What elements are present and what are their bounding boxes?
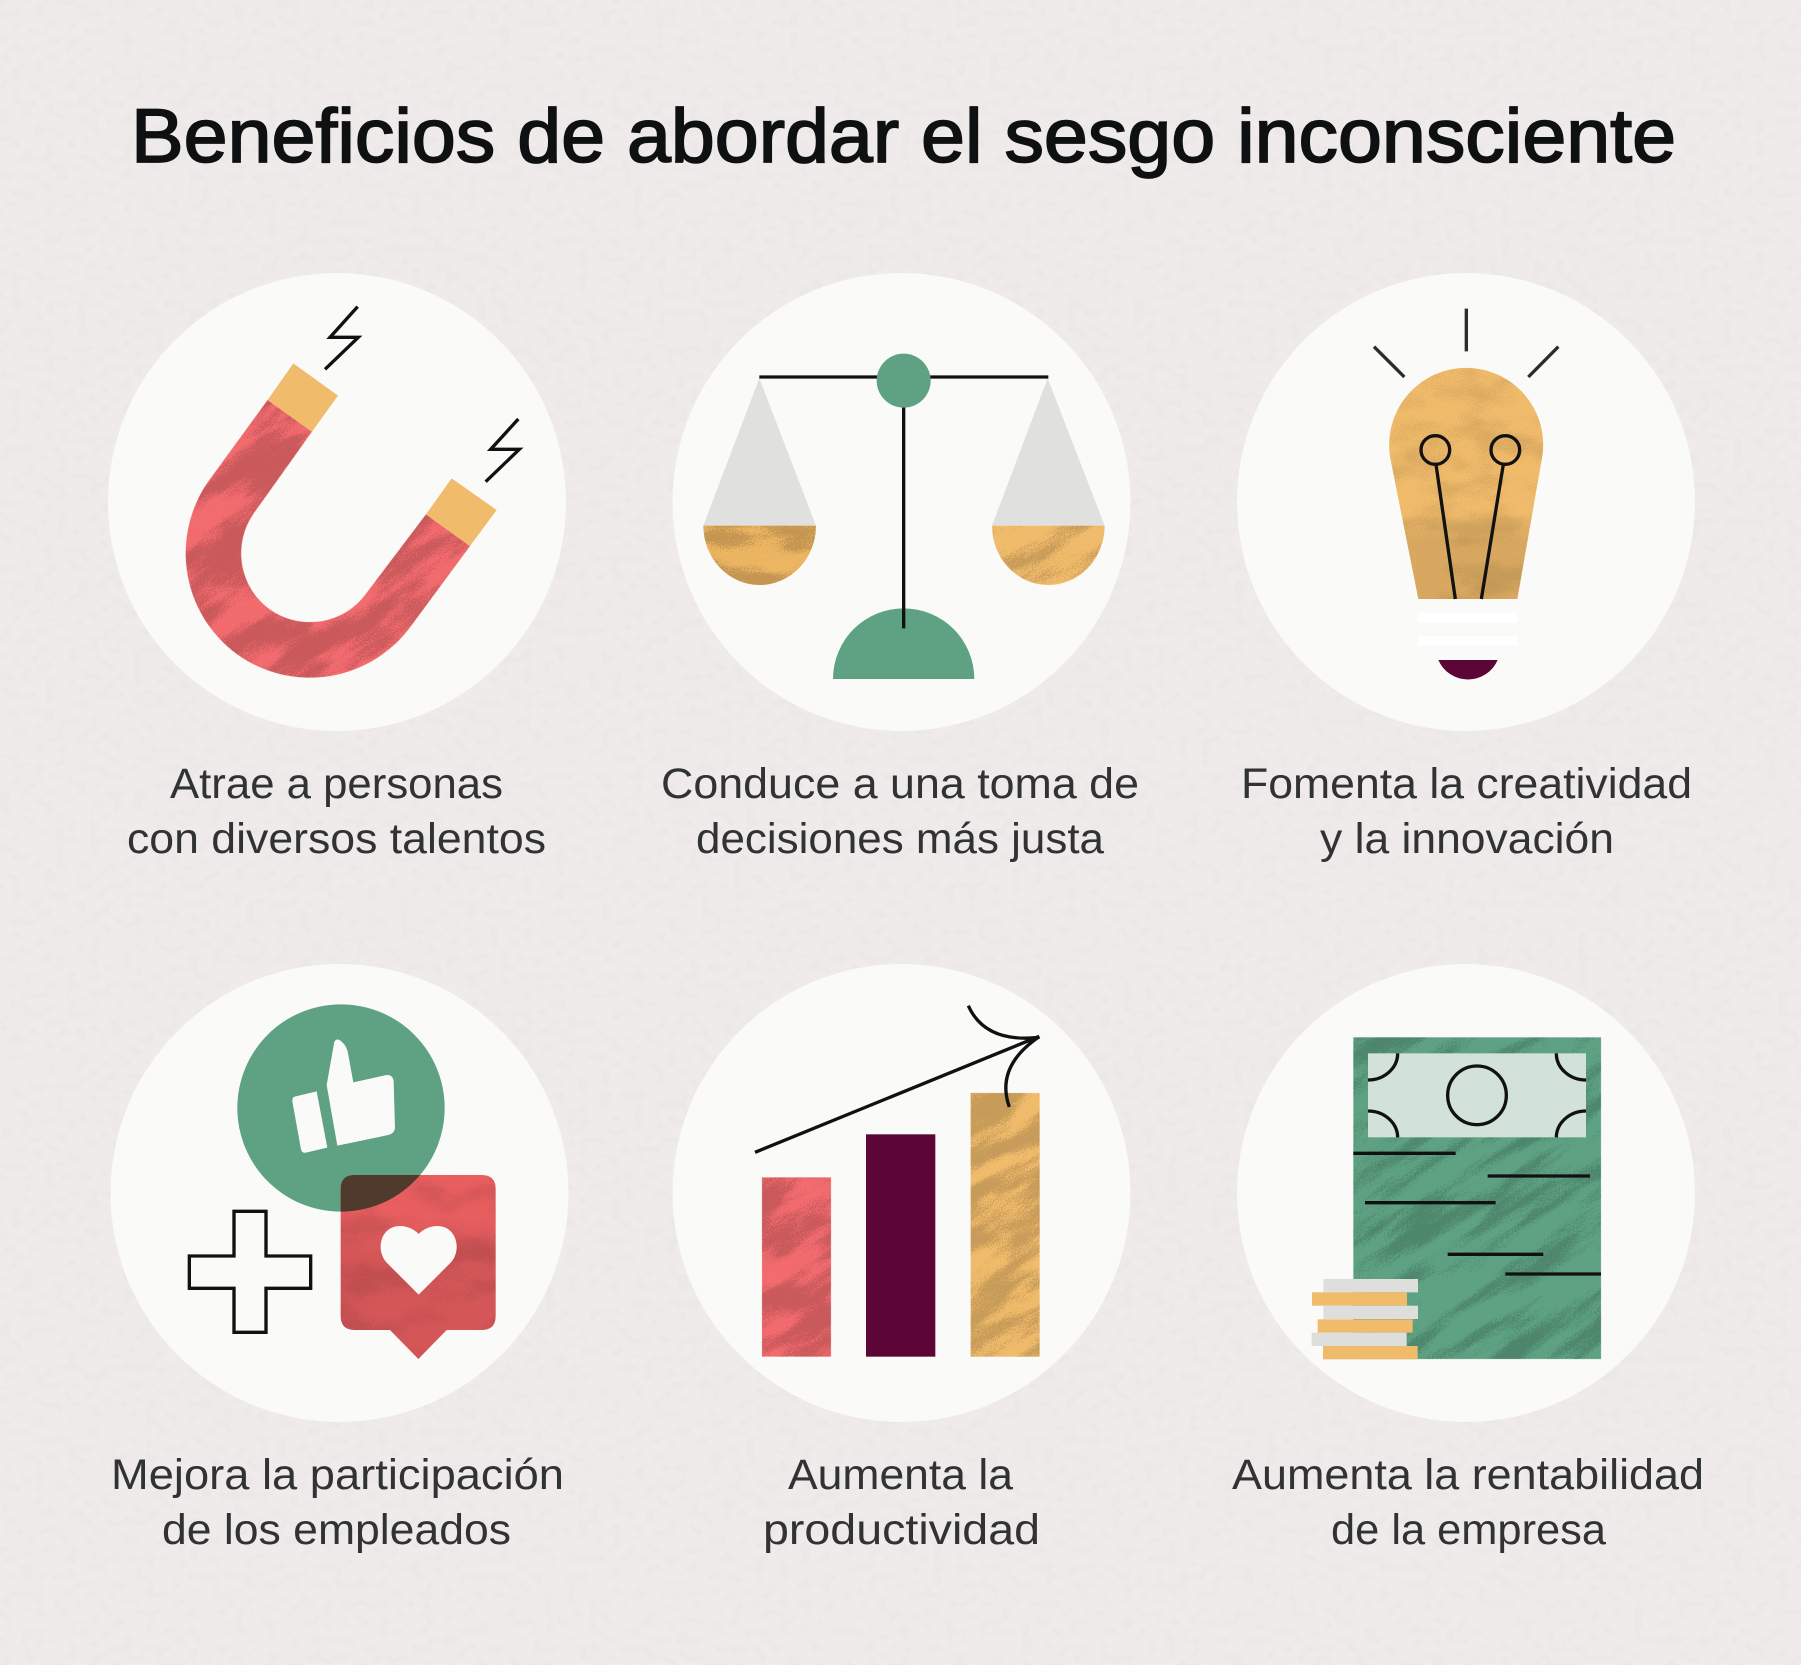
- panel: productividad: [672, 964, 1154, 1554]
- label: [1232, 1451, 1704, 1554]
- label: Aumenta la rentabilidad: [1232, 1451, 1704, 1499]
- label: [127, 760, 546, 863]
- label: Mejora la participación: [111, 1451, 564, 1499]
- icon: banknote and coins: [1202, 921, 1752, 1475]
- label: de los empleados: [162, 1506, 511, 1554]
- circle background: [1237, 964, 1695, 1422]
- icon: magnet: [55, 266, 600, 811]
- panel: decisiones justas: [661, 273, 1139, 863]
- label: y la innovación: [1320, 815, 1614, 863]
- icon: light bulb: [1374, 309, 1558, 679]
- label: [661, 760, 1139, 863]
- label: decisiones más justa: [696, 815, 1104, 863]
- circle background: [110, 964, 568, 1422]
- label: Atrae a personas: [170, 760, 503, 808]
- icon: scales: [703, 354, 1130, 679]
- panel: atrae a personas: [55, 266, 600, 863]
- label: con diversos talentos: [127, 815, 546, 863]
- circle background: [108, 273, 566, 731]
- icon: thumbs up, heart bubble and plus: [189, 1004, 496, 1359]
- label: Conduce a una toma de: [661, 760, 1139, 808]
- label: [763, 1451, 1040, 1554]
- label: de la empresa: [1331, 1506, 1606, 1554]
- panel: creatividad: [1237, 273, 1695, 863]
- panel: participación: [110, 964, 568, 1554]
- label: [1241, 760, 1692, 863]
- icon: bar chart with arrow: [684, 1006, 1154, 1387]
- panel: rentabilidad: [1202, 921, 1752, 1554]
- title: Beneficios de abordar el sesgo inconsciente: [131, 94, 1676, 179]
- label: Aumenta la: [788, 1451, 1013, 1499]
- circle background: [672, 964, 1130, 1422]
- label: Fomenta la creatividad: [1241, 760, 1692, 808]
- circle background: [672, 273, 1130, 731]
- circle background: [1237, 273, 1695, 731]
- label: productividad: [763, 1506, 1040, 1554]
- label: [111, 1451, 564, 1554]
